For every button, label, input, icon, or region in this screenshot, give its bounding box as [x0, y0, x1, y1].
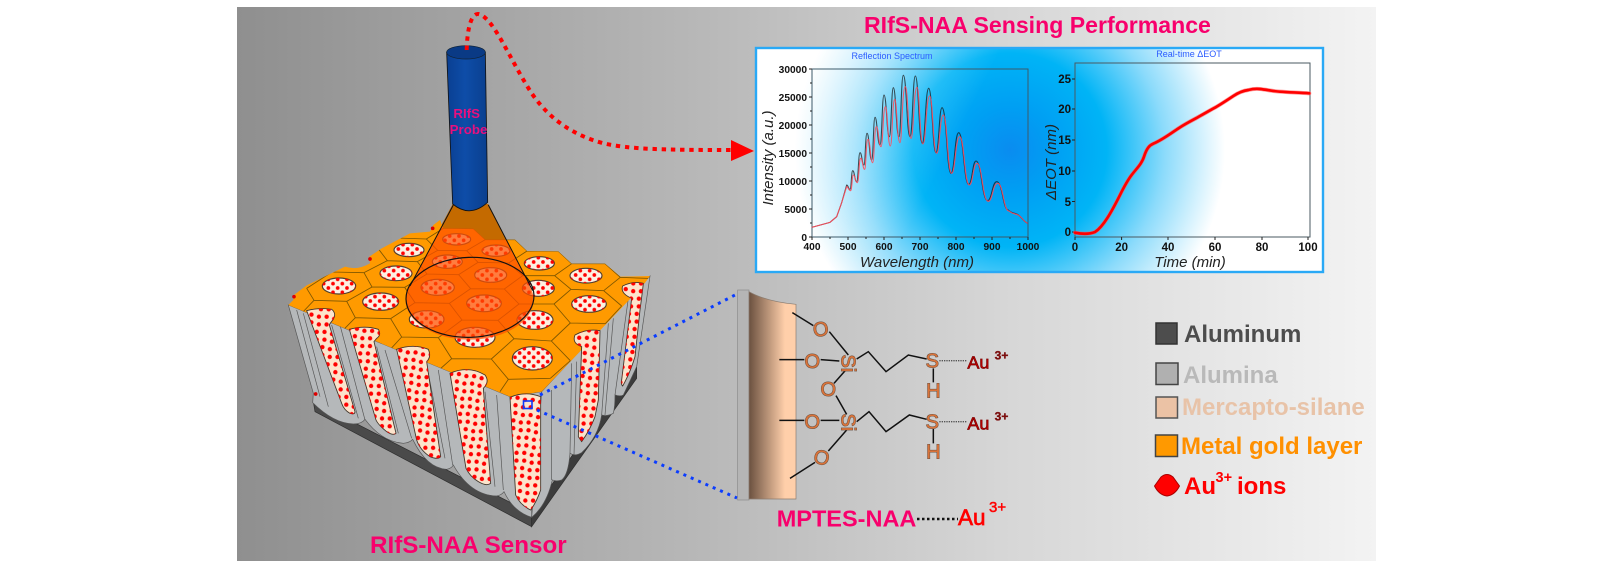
spectrum chart: 0 — [801, 233, 807, 244]
real-time EOT chart: Time (min) — [1154, 254, 1226, 271]
spectrum chart: 30000 — [779, 65, 807, 76]
real-time EOT chart: 100 — [1298, 242, 1318, 254]
spectrum chart: 10000 — [779, 177, 807, 188]
legend: gold ions: 3+ — [1216, 470, 1232, 486]
real-time EOT chart: 80 — [1256, 242, 1268, 254]
atom labels: O — [805, 351, 820, 373]
3D nanoporous sensor block — [288, 204, 650, 528]
spectrum chart: Wavelength (nm) — [860, 254, 974, 271]
legend — [1154, 321, 1365, 500]
real-time EOT chart: 60 — [1209, 242, 1221, 254]
real-time EOT chart: ΔEOT (nm) — [1043, 124, 1060, 201]
performance panel — [756, 48, 1323, 272]
nanotube cross sections with ions — [307, 282, 643, 510]
light cone, upper part — [430, 204, 510, 247]
infographic canvas — [237, 7, 1376, 561]
real-time EOT chart: 20 — [1058, 104, 1071, 116]
gold top layer — [288, 220, 650, 396]
legend: alumina: Alumina — [1183, 362, 1278, 389]
real-time EOT chart: 5 — [1065, 197, 1072, 209]
dotted coordination bonds — [939, 361, 967, 422]
atom labels: O — [821, 379, 836, 401]
spectrum chart: Reflection Spectrum — [851, 51, 933, 61]
real-time EOT chart: 20 — [1115, 242, 1128, 254]
spectrum chart: 20000 — [779, 121, 807, 132]
molecular surface diagram — [738, 290, 1008, 500]
spectrum chart: 25000 — [779, 93, 807, 104]
pore openings with gold ions — [322, 234, 606, 370]
spectrum chart: 600 — [876, 242, 893, 253]
MPTES-NAA caption: MPTES-NAA — [777, 506, 916, 532]
gold ion labels: 3+ — [995, 349, 1008, 363]
red arrowhead — [731, 140, 754, 161]
EOT curve — [1075, 89, 1309, 234]
legend: aluminum: Aluminum — [1184, 321, 1301, 348]
atom labels: O — [811, 318, 830, 342]
legend: gold ions: ions — [1237, 473, 1286, 500]
atom labels: O — [811, 446, 832, 471]
gradient background panel — [237, 7, 1376, 561]
atom labels: H — [926, 441, 941, 463]
real-time EOT chart: 10 — [1058, 166, 1071, 178]
real-time EOT chart: 0 — [1072, 242, 1078, 254]
spectrum chart: Intensity (a.u.) — [760, 110, 777, 206]
atom labels: Si — [836, 413, 858, 431]
RIfS probe — [447, 46, 488, 211]
atom labels — [805, 318, 941, 471]
atom labels: Si — [836, 354, 858, 372]
spectrum chart: 15000 — [779, 149, 807, 160]
alumina walls — [288, 276, 650, 517]
real-time EOT chart: 40 — [1162, 242, 1174, 254]
pore wall layers — [738, 290, 796, 500]
atom labels: O — [805, 412, 820, 434]
probe label: RIfS — [453, 106, 480, 121]
aluminum base — [313, 363, 637, 527]
gold ion labels: 3+ — [995, 410, 1008, 424]
spectrum curves — [812, 75, 1028, 227]
chemical bonds — [779, 313, 933, 478]
spectrum chart: 700 — [912, 242, 929, 253]
legend: mercapto-silane: Mercapto-silane — [1182, 394, 1365, 421]
legend: gold ions: Au — [1184, 473, 1216, 500]
gold ion labels — [967, 349, 1008, 433]
atom labels: S — [926, 350, 939, 372]
light cone overlay — [405, 205, 535, 340]
spectrum chart — [760, 51, 1040, 271]
spectrum chart: 900 — [984, 242, 1001, 253]
spectrum chart: 400 — [804, 242, 821, 253]
edge ions — [294, 228, 433, 394]
real-time EOT chart — [1043, 49, 1318, 271]
title: sensing performance: RIfS-NAA Sensing Performance — [864, 12, 1211, 38]
blue zoom connector — [524, 294, 737, 498]
atom labels: S — [926, 411, 939, 433]
gold ion labels: Au — [967, 413, 989, 433]
real-time EOT chart: 25 — [1058, 74, 1072, 86]
legend: gold ions — [1154, 470, 1286, 500]
real-time EOT chart: Real-time ΔEOT — [1156, 49, 1222, 59]
real-time EOT chart: 15 — [1058, 135, 1072, 147]
probe label: Probe — [450, 122, 487, 137]
MPTES-NAA caption: Au — [958, 505, 986, 530]
gold ion labels: Au — [967, 352, 989, 372]
legend: metal gold layer: Metal gold layer — [1181, 433, 1362, 460]
MPTES-NAA caption — [777, 499, 1006, 532]
red dotted signal path — [467, 14, 731, 150]
atom labels: H — [926, 381, 941, 403]
spectrum chart: 500 — [840, 242, 857, 253]
spectrum chart: 800 — [948, 242, 965, 253]
spectrum chart: 5000 — [784, 205, 807, 216]
RIfS-NAA Sensor caption: RIfS-NAA Sensor — [370, 532, 567, 559]
MPTES-NAA caption: 3+ — [989, 499, 1006, 516]
spectrum chart: 1000 — [1017, 242, 1040, 253]
real-time EOT chart: 0 — [1065, 227, 1071, 239]
